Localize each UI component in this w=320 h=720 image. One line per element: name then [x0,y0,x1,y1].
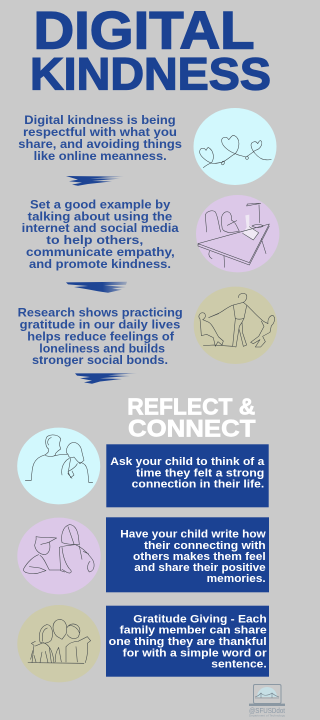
text block: good example [22,198,179,271]
card: ask your child: connection in their life. [132,479,264,491]
text block: definition: respectful with what you [23,126,177,139]
text block: research [18,306,183,367]
icon: parent and child writing circle [17,518,101,594]
text block: good example: and promote kindness. [29,258,171,271]
text block: research: stronger social bonds. [32,354,168,367]
card: ask your child: Ask your child to think of a [110,456,265,468]
card: write how [106,517,269,592]
text block: research: gratitude in our daily lives [20,318,180,331]
title: DIGITAL [34,1,254,60]
text block: good example: to help others, [46,234,143,247]
text block: definition: like online meanness. [34,150,167,163]
brush stroke [66,176,124,186]
text block: good example: talking about using the [28,210,173,223]
title [30,1,271,99]
card: ask your child: time they felt a strong [136,467,264,479]
card: write how: Have your child write how [120,528,266,540]
icon: person at desk circle [196,195,279,272]
brush stroke [66,282,127,293]
card: gratitude giving: sentence. [211,659,267,671]
icon: hearts circle [194,108,276,185]
text block: definition: share, and avoiding things [18,138,182,151]
text block: good example: Set a good example by [30,198,171,211]
heading: reflect and connect [127,393,256,443]
text block: research: helps reduce feelings of [27,330,174,343]
card: write how: others makes them feel [133,551,266,563]
text block: research: Research shows practicing [18,306,183,319]
text block: definition [18,114,182,163]
brush stroke [75,373,137,384]
card: gratitude giving: for with a simple word or [123,647,267,659]
text block: good example: internet and social media [22,222,179,235]
logo: SFUSDdot: Department of Technology [249,714,286,718]
heading: reflect and connect: REFLECT & [127,393,255,419]
text block: research: loneliness and builds [39,342,165,355]
card: gratitude giving: one thing they are thankful [109,636,267,648]
card: gratitude giving [106,606,269,677]
text block: good example: communicate empathy, [26,246,175,259]
card: write how: their connecting with [144,540,266,552]
text block: definition: Digital kindness is being [24,114,176,127]
title: KINDNESS [30,48,271,99]
card: ask your child [106,444,269,507]
icon: three family members circle [17,605,101,682]
icon: family holding hands circle [194,287,277,364]
heading: reflect and connect: CONNECT [128,416,256,443]
card: gratitude giving: family member can share [120,625,267,637]
logo: SFUSDdot [249,684,286,718]
card: write how: and share their positive [134,562,266,574]
icon: couple circle [17,428,100,504]
card: gratitude giving: Gratitude Giving - Each [133,613,267,625]
card: write how: memories. [207,573,266,585]
